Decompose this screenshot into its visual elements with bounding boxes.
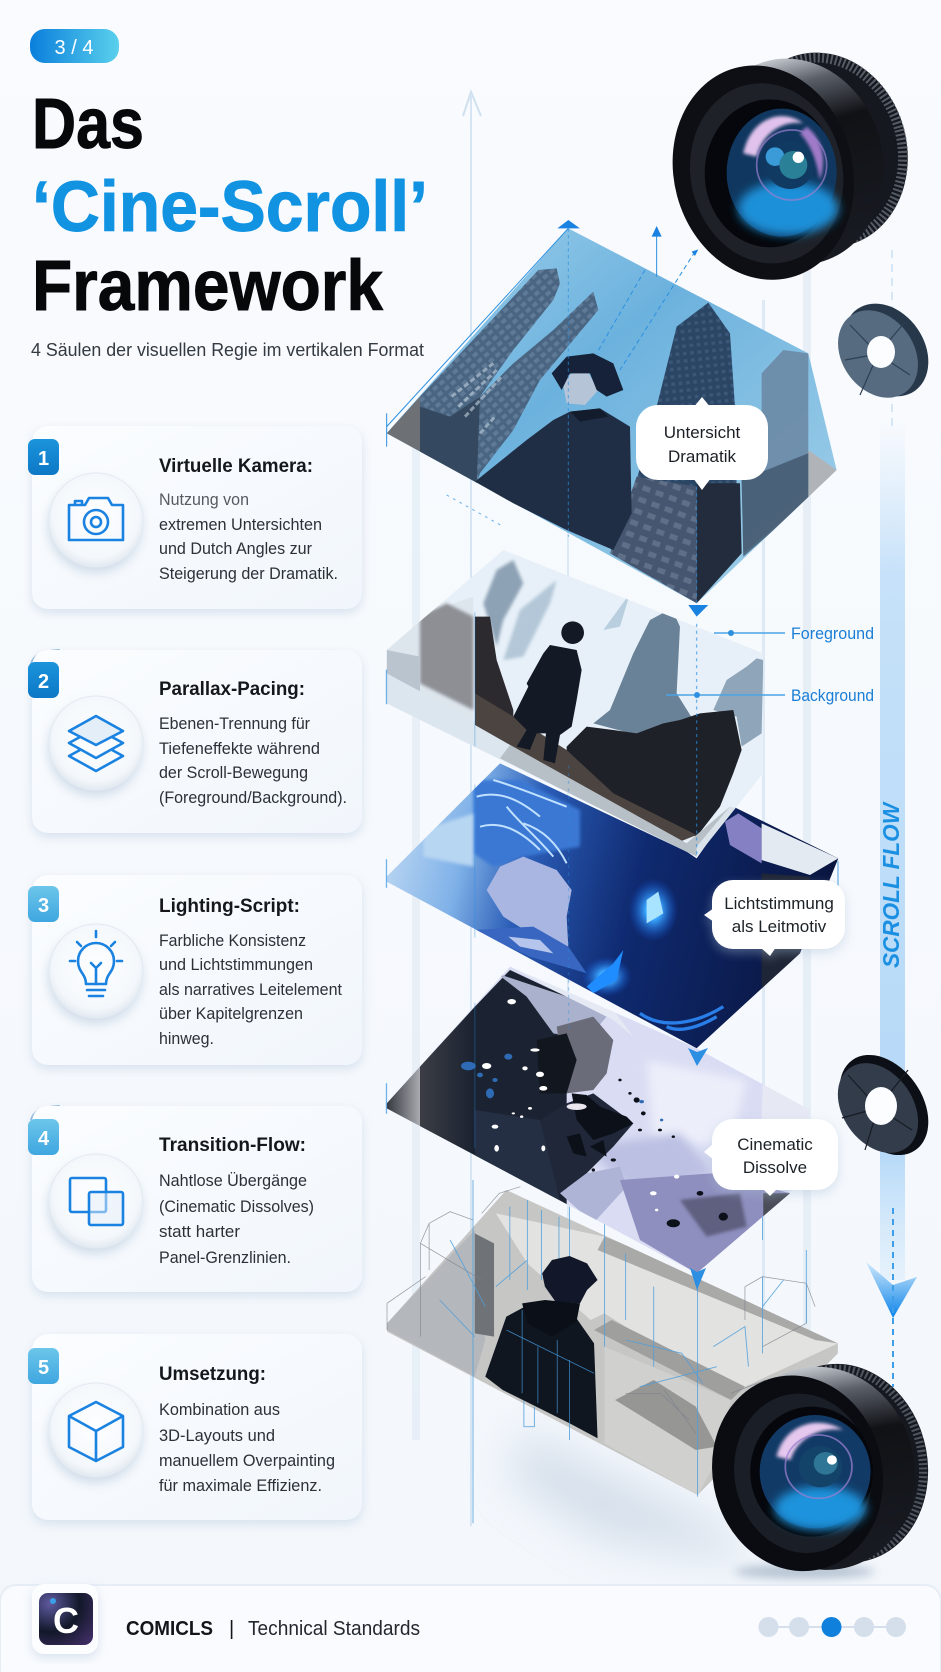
panel: card 3 Lighting-Script: als narratives Leitelement (159, 980, 342, 999)
callout: Lichtstimmung als Leitmotiv: Lichtstimmung (724, 894, 834, 913)
arrow: scroll flow down (866, 1262, 917, 1318)
scroll flow bar (866, 250, 917, 1387)
badge 5 (28, 1348, 59, 1384)
panel: card 1 Virtuelle Kamera (28, 426, 362, 609)
panel: card 4 Transition-Flow: (Cinematic Dissolves) (159, 1197, 314, 1216)
lens: top camera lens (649, 33, 929, 300)
icon: overlapping squares (49, 1154, 143, 1248)
title: Das (32, 85, 144, 164)
panel: card 3 Lighting-Script (28, 875, 362, 1065)
panel: card 1 Virtuelle Kamera: Virtuelle Kamera: (159, 456, 313, 477)
badge 1 (28, 439, 59, 475)
panel: card 2 Parallax-Pacing: Tiefeneffekte während (159, 739, 320, 758)
panel: card 4 Transition-Flow: statt harter (159, 1222, 240, 1241)
panel: card 2 Parallax-Pacing: der Scroll-Bewegung (159, 763, 308, 782)
callout: Untersicht Dramatik: Untersicht (664, 423, 741, 442)
label: foreground: Foreground (791, 625, 874, 643)
arrow markers on panels (688, 1048, 708, 1290)
panel 2: parallax layers (380, 547, 767, 860)
callout: Untersicht Dramatik (636, 397, 768, 490)
badge 1: 1 (38, 448, 49, 470)
panel: card 3 Lighting-Script: und Lichtstimmungen (159, 955, 313, 974)
title: ‘Cine-Scroll’ (32, 168, 428, 247)
panel: card 5 Umsetzung: für maximale Effizienz. (159, 1476, 322, 1495)
panel: card 1 Virtuelle Kamera: extremen Untersichten (159, 515, 322, 534)
logo: COMICLS: C (53, 1600, 79, 1641)
badge 3: 3 (38, 895, 49, 917)
panel: card 3 Lighting-Script: Farbliche Konsistenz (159, 931, 306, 950)
badge 5: 5 (38, 1357, 49, 1379)
callout: Lichtstimmung als Leitmotiv: als Leitmotiv (732, 917, 827, 936)
title (32, 85, 428, 326)
panel: card 2 Parallax-Pacing: Ebenen-Trennung für (159, 714, 310, 733)
logo: COMICLS (32, 1584, 98, 1654)
pagination dots (758, 1617, 906, 1637)
callout: Cinematic Dissolve (704, 1119, 838, 1196)
panel: card 3 Lighting-Script: hinweg. (159, 1029, 214, 1048)
figure: character looking up (475, 353, 632, 550)
subtitle: 4 Säulen der visuellen Regie im vertikalen Format (31, 339, 424, 360)
panel: card 4 Transition-Flow: Nahtlose Übergänge (159, 1171, 307, 1190)
arrow heads on guides (557, 220, 708, 617)
badge 4 (28, 1119, 59, 1155)
panel: card 1 Virtuelle Kamera: und Dutch Angles zur (159, 539, 312, 558)
page badge (30, 29, 119, 63)
panel: card 1 Virtuelle Kamera: Steigerung der Dramatik. (159, 564, 338, 583)
badge 2: 2 (38, 671, 49, 693)
panel: card 2 Parallax-Pacing (28, 649, 362, 833)
brand text: COMICLS (126, 1618, 213, 1640)
page badge: 3 / 4 (55, 37, 93, 59)
brand text: | (229, 1618, 234, 1640)
label: scroll flow: SCROLL FLOW (878, 801, 904, 968)
lens: bottom camera lens (696, 1351, 941, 1584)
panel: card 5 Umsetzung: Kombination aus (159, 1400, 280, 1419)
shadow under panel stack (510, 1430, 760, 1565)
lens: aperture ring top (822, 287, 941, 413)
badge 3 (28, 886, 59, 922)
panel 3: lighting script (380, 760, 847, 1053)
callout: Cinematic Dissolve: Cinematic (737, 1135, 813, 1154)
panel: card 1 Virtuelle Kamera: Nutzung von (159, 490, 249, 509)
badge 4: 4 (38, 1128, 50, 1150)
brand text (126, 1618, 420, 1640)
title: Framework (32, 247, 383, 326)
panel: card 5 Umsetzung: Umsetzung: (159, 1364, 266, 1385)
icon: 3D cube (49, 1383, 143, 1477)
label: background (666, 687, 874, 705)
lens: aperture ring bottom (821, 1038, 941, 1172)
panel 5: wireframe layout (380, 1180, 843, 1523)
figure: coat character (513, 621, 584, 763)
footer bar (0, 1584, 941, 1672)
callout: Lichtstimmung als Leitmotiv (704, 880, 845, 956)
panel: card 5 Umsetzung: 3D-Layouts und (159, 1426, 275, 1445)
callout: Cinematic Dissolve: Dissolve (743, 1158, 807, 1177)
panel: card 4 Transition-Flow (28, 1105, 362, 1292)
panel 4: cinematic dissolve (380, 960, 813, 1280)
panel: card 2 Parallax-Pacing: Parallax-Pacing: (159, 679, 305, 700)
callout: Untersicht Dramatik: Dramatik (668, 447, 737, 466)
panel: card 5 Umsetzung: manuellem Overpainting (159, 1451, 335, 1470)
panel: card 3 Lighting-Script: über Kapitelgrenzen (159, 1004, 303, 1023)
panel: card 2 Parallax-Pacing: (Foreground/Background). (159, 788, 347, 807)
panel: card 4 Transition-Flow: Panel-Grenzlinien. (159, 1248, 291, 1267)
arrow: upward axis (463, 92, 481, 116)
panel 1: low-angle city view (380, 220, 847, 620)
panel: card 5 Umsetzung (28, 1334, 362, 1520)
brand text: Technical Standards (248, 1618, 420, 1640)
icon: camera (49, 473, 143, 567)
panel: card 4 Transition-Flow: Transition-Flow: (159, 1135, 306, 1156)
icon: layers (49, 696, 143, 790)
badge 2 (28, 662, 59, 698)
panel: card 3 Lighting-Script: Lighting-Script: (159, 896, 300, 917)
blue perspective guides (387, 228, 697, 603)
glass guide columns (412, 96, 811, 1526)
label: background: Background (791, 687, 874, 705)
icon: light bulb (49, 924, 143, 1018)
label: foreground (714, 625, 874, 643)
panel guide lines lower (386, 612, 838, 1148)
figure: hooded character from behind (485, 1256, 598, 1438)
